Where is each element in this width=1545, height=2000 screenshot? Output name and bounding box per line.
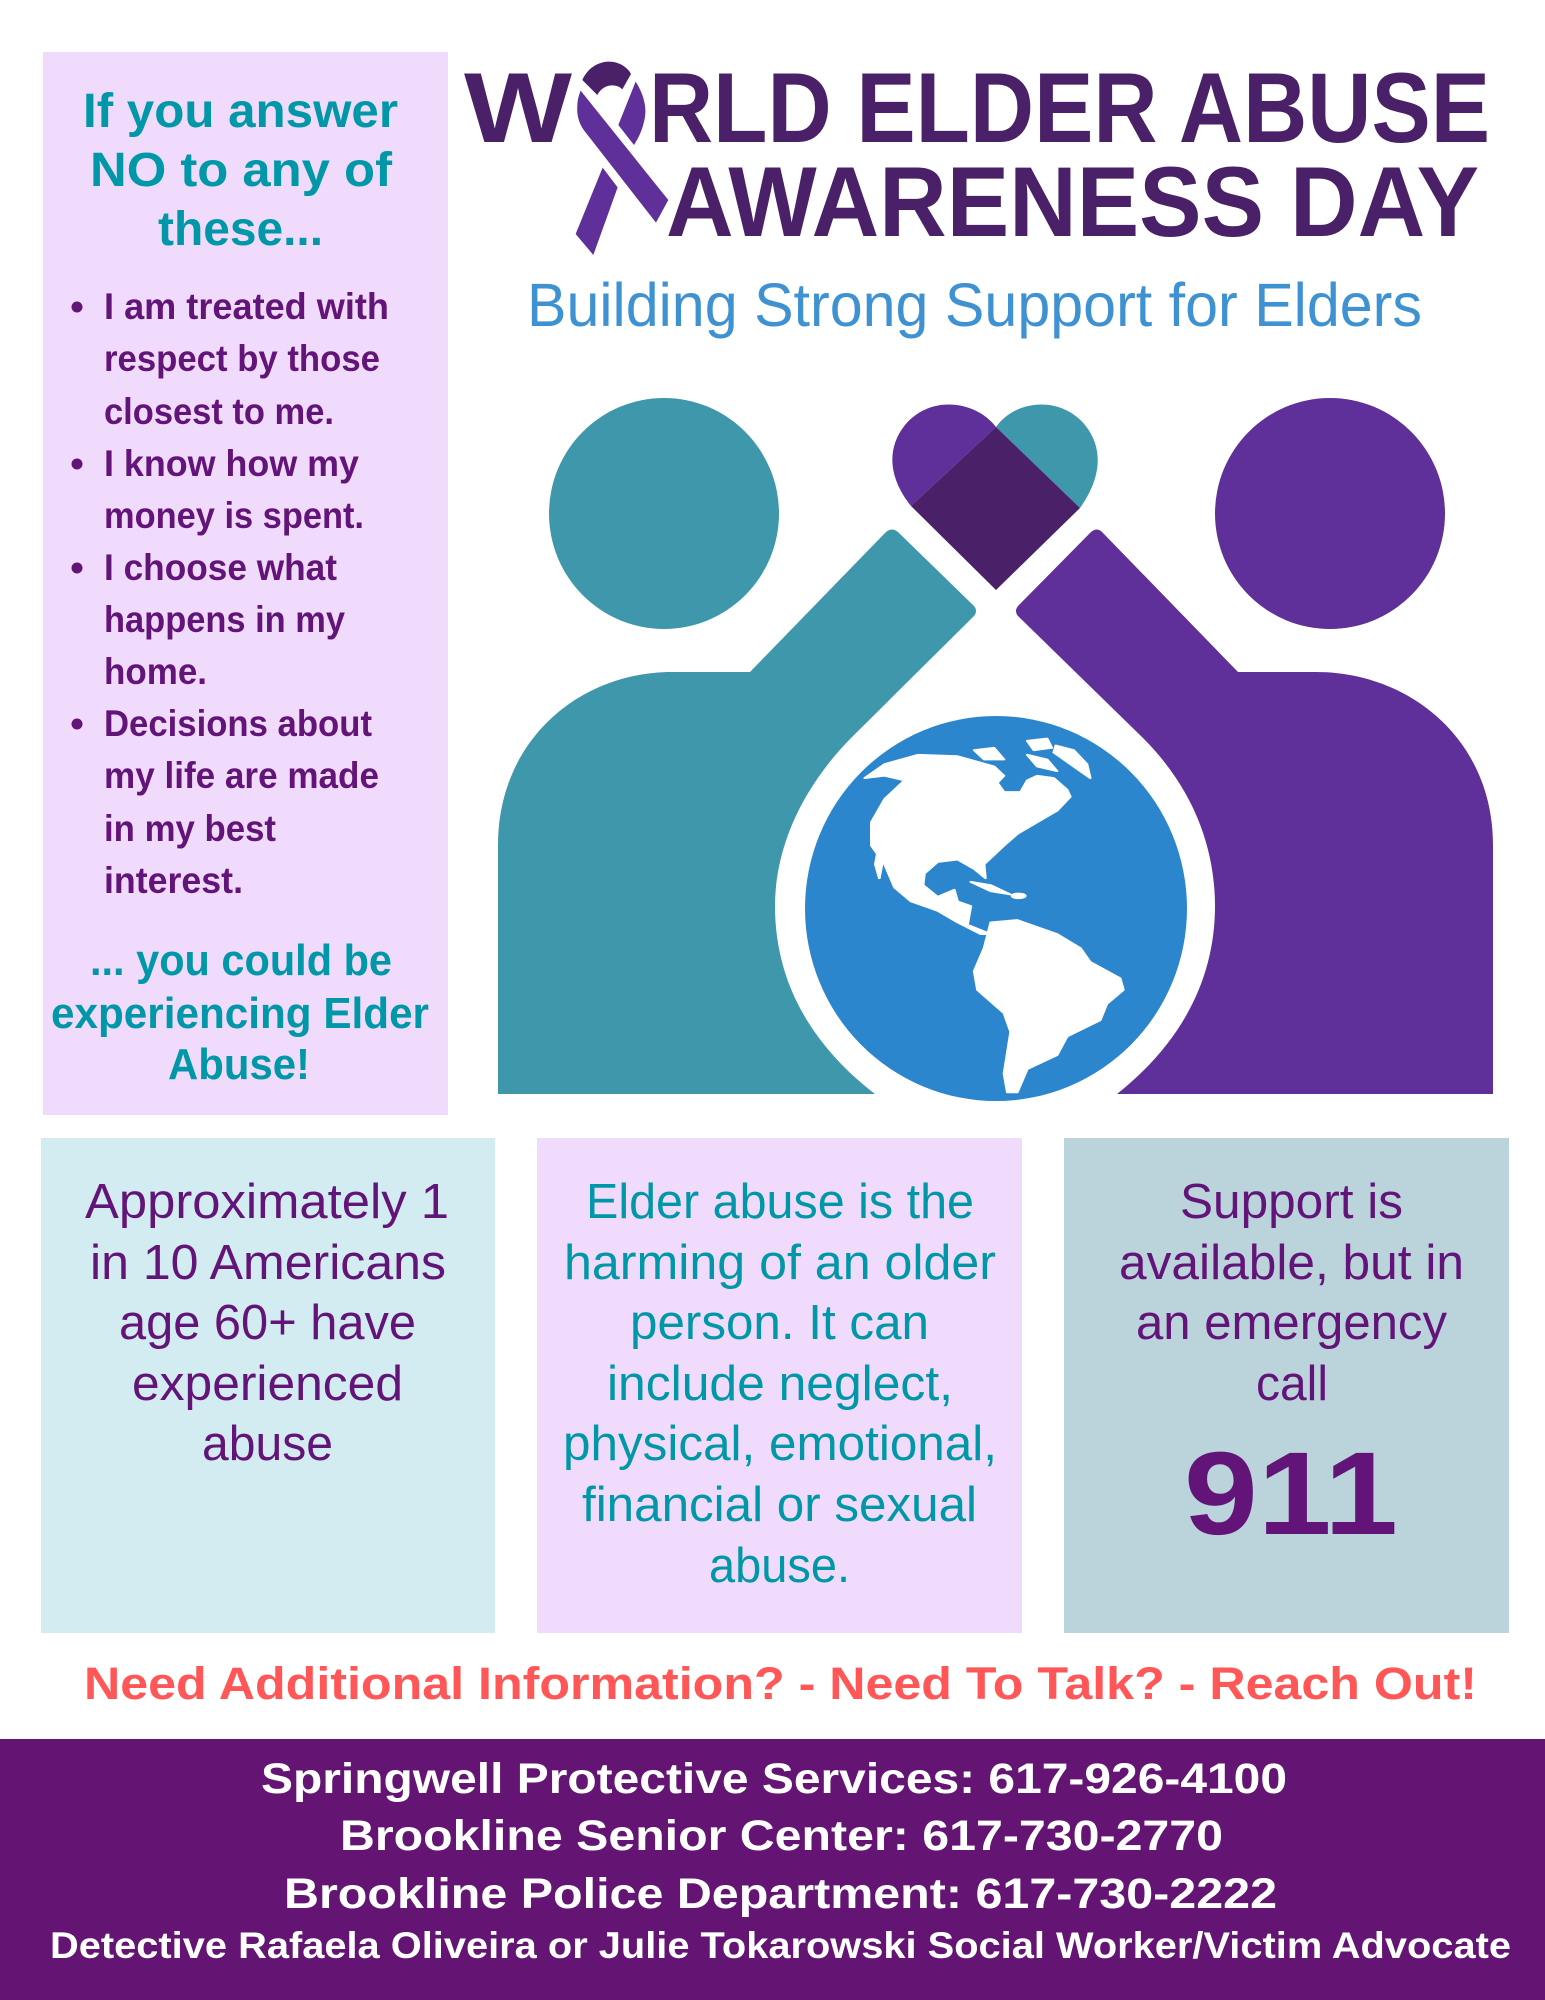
bullet list: statements: I choose what	[104, 547, 337, 588]
footer: contact details: Brookline Senior Center: 617-730-2770	[340, 1812, 1223, 1860]
panel: statistic: Approximately 1	[85, 1175, 449, 1229]
bullet list: statements: interest.	[104, 860, 243, 901]
bullet list: statements: home.	[104, 651, 207, 692]
heading: if you answer no: If you answer	[83, 85, 398, 138]
panel: statistic	[41, 1138, 495, 1633]
panel: definition: include neglect,	[607, 1357, 953, 1411]
icon: heart	[892, 405, 1098, 590]
heading: if you answer no: NO to any of	[90, 144, 393, 197]
icon: purple awareness ribbon	[576, 62, 668, 255]
icon: teal person	[498, 398, 976, 1094]
panel: definition: Elder abuse is the	[586, 1175, 974, 1229]
bullet list: statements: I know how my	[104, 443, 359, 484]
title: World Elder Abuse Awareness Day logo: W	[464, 52, 573, 163]
heading: if you answer no: these...	[158, 203, 323, 256]
bullet list: statements: in my best	[104, 808, 276, 849]
panel: statistic: abuse	[202, 1417, 333, 1471]
icon: purple person	[1016, 398, 1493, 1094]
heading: if you answer no	[83, 85, 398, 256]
bullet list: statements: respect by those	[104, 338, 380, 379]
panel: emergency support: an emergency	[1136, 1296, 1447, 1350]
bullet list: statements: money is spent.	[104, 495, 364, 536]
call to action: Need Additional Information? - Need To Talk? - Reach Out!	[84, 1658, 1477, 1709]
icon: globe	[805, 716, 1187, 1101]
tagline: Building Strong Support for Elders	[527, 271, 1422, 339]
bullet list: statements: I am treated with	[104, 286, 389, 327]
closing statement	[51, 936, 429, 1089]
panel: statistic: age 60+ have	[119, 1296, 416, 1350]
footer: contact details	[0, 1739, 1545, 2000]
panel: emergency support: available, but in	[1119, 1236, 1464, 1290]
bullet list: statements: closest to me.	[104, 391, 334, 432]
panel: emergency support: call	[1256, 1357, 1328, 1411]
panel: definition	[537, 1138, 1022, 1633]
closing statement: Abuse!	[168, 1040, 310, 1089]
panel: emergency support	[1064, 1138, 1509, 1633]
bullet list: statements: Decisions about	[104, 703, 372, 744]
bullet list: statements: my life are made	[104, 755, 379, 796]
panel: statistic: experienced	[132, 1357, 403, 1411]
title: World Elder Abuse Awareness Day logo: AWARENESS DAY	[666, 146, 1479, 257]
panel: definition: abuse.	[709, 1539, 850, 1593]
panel: self-check questions	[43, 52, 448, 1115]
panel: statistic: in 10 Americans	[90, 1236, 446, 1290]
panel: definition: harming of an older	[564, 1236, 996, 1290]
title: World Elder Abuse Awareness Day logo	[464, 52, 1490, 257]
panel: definition: physical, emotional,	[563, 1417, 997, 1471]
illustration: two people, heart and globe	[498, 398, 1493, 1101]
closing statement: experiencing Elder	[51, 989, 429, 1038]
footer: contact details: Brookline Police Department: 617-730-2222	[284, 1870, 1277, 1918]
closing statement: ... you could be	[90, 936, 392, 985]
bullet list: statements	[72, 286, 389, 901]
panel: emergency support: Support is	[1180, 1175, 1403, 1229]
footer: contact details: Springwell Protective Services: 617-926-4100	[261, 1755, 1287, 1803]
bullet list: statements: happens in my	[104, 599, 345, 640]
footer: contact details: Detective Rafaela Oliveira or Julie Tokarowski Social Worker/Victim Advocate	[50, 1925, 1511, 1966]
panel: definition: person. It can	[630, 1296, 929, 1350]
panel: definition: financial or sexual	[582, 1478, 977, 1532]
emergency number: 911	[1184, 1428, 1398, 1560]
